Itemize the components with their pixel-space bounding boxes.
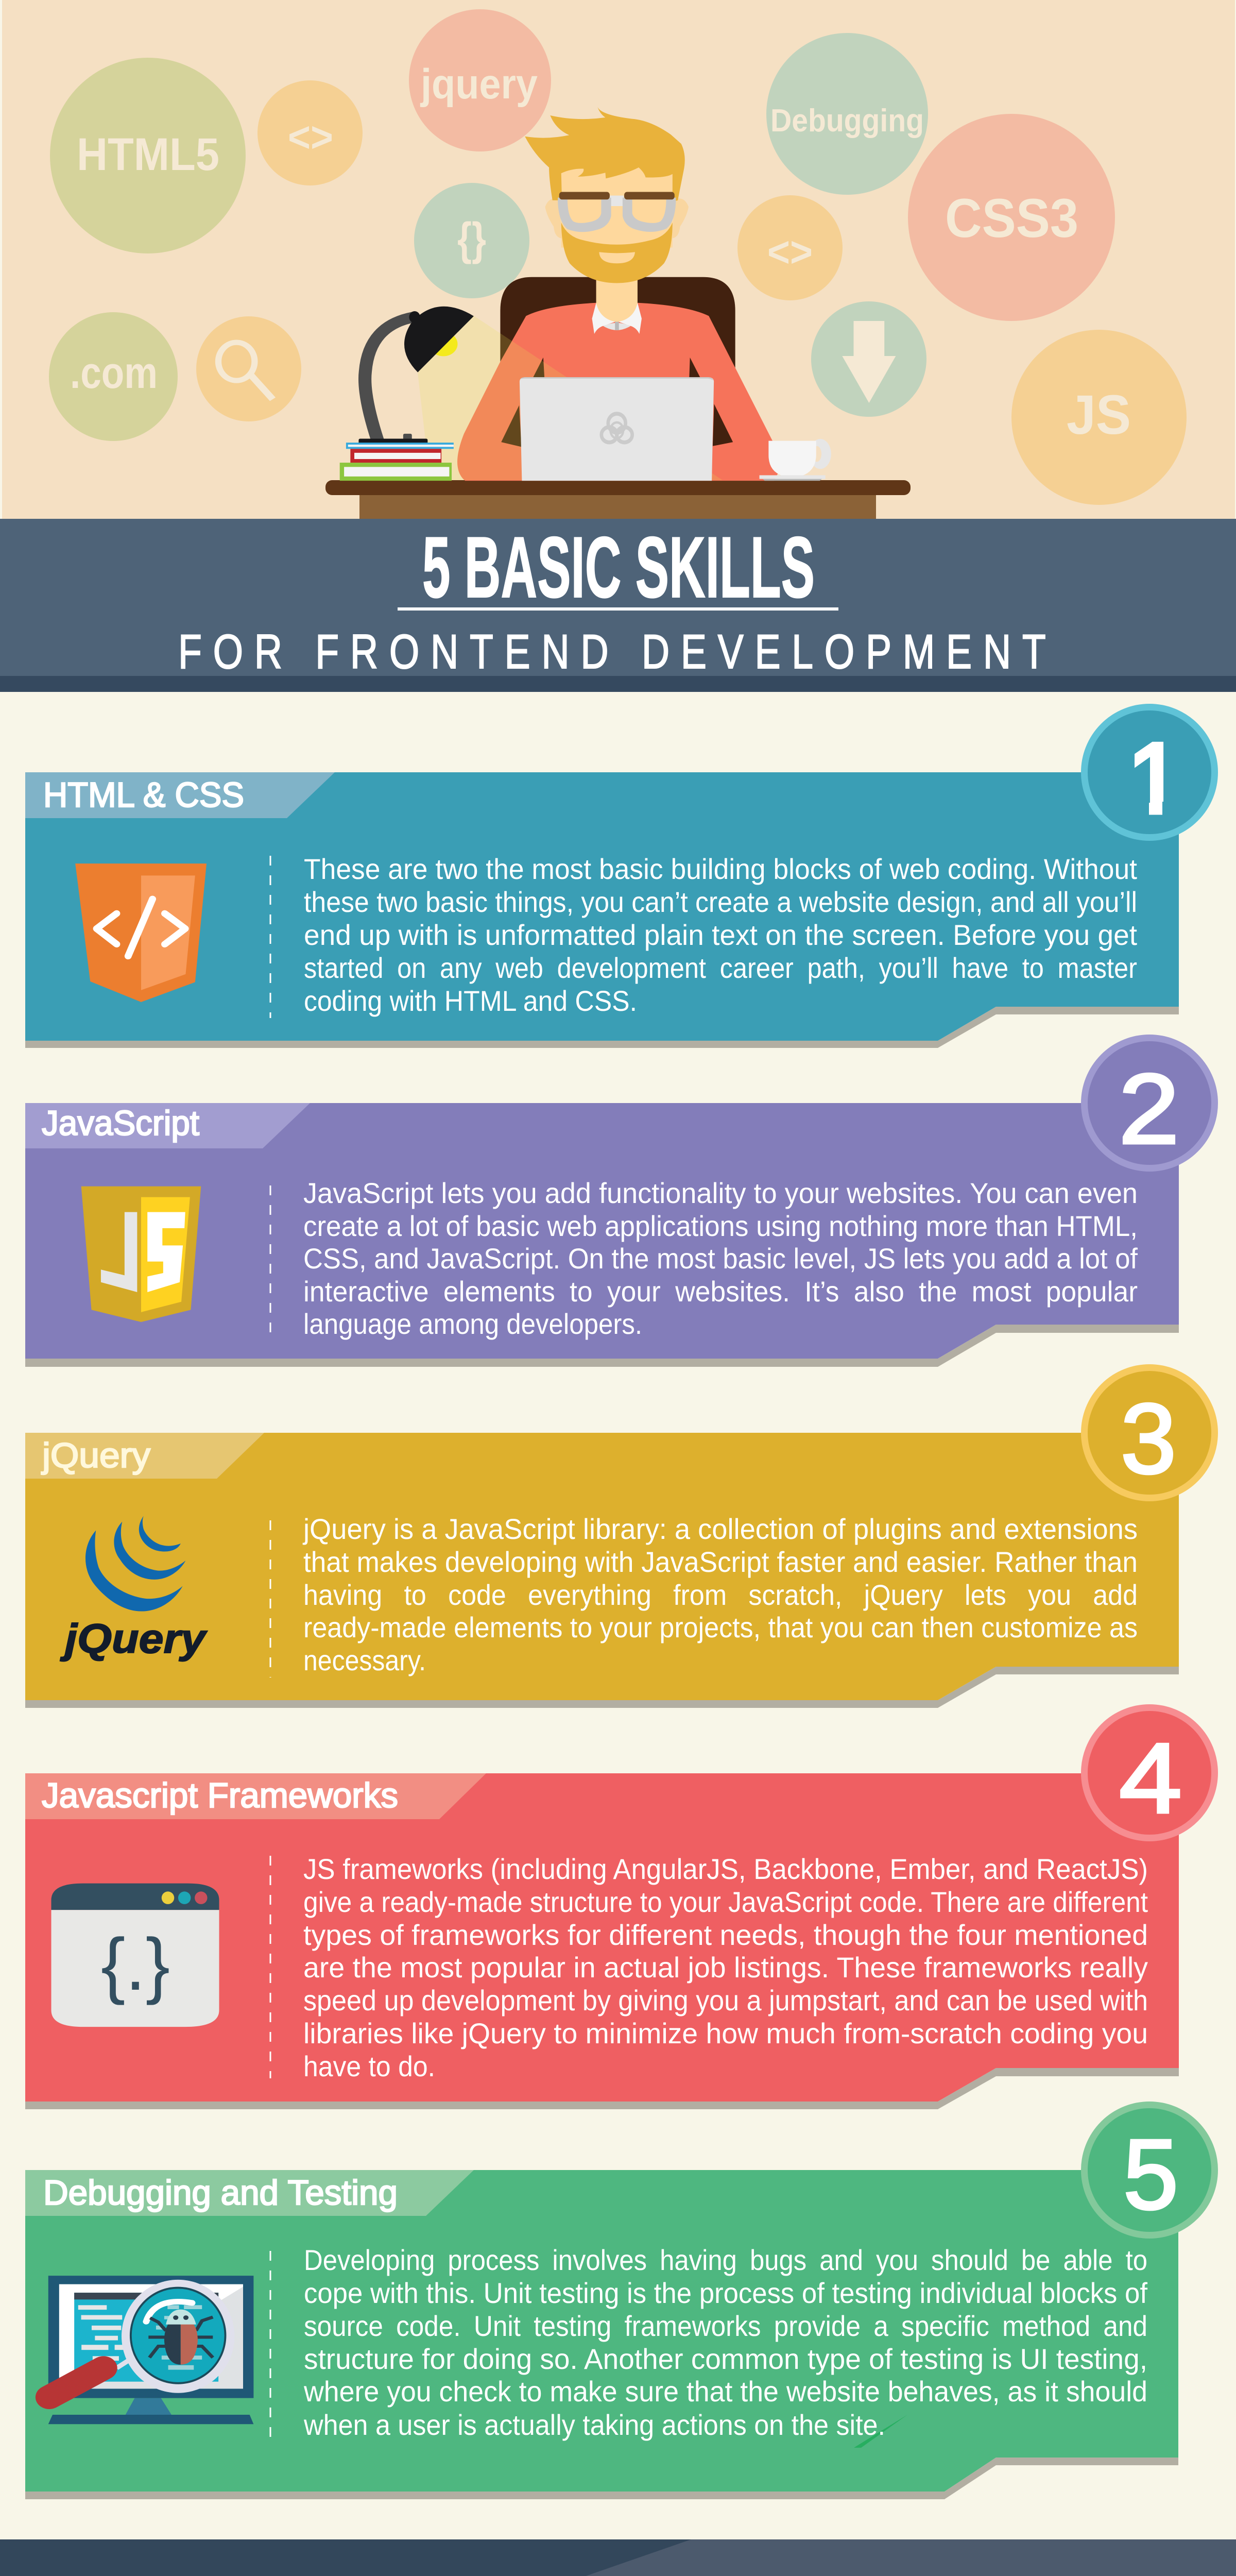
- bubble: angle brackets left: <>: [288, 114, 333, 161]
- bubble: jquery: [409, 9, 551, 151]
- body text: JavaScript lets you add functionality to your websites. You can even: [303, 1177, 1138, 1209]
- bubble: .com: .com: [70, 348, 158, 398]
- bubble: Debugging: [766, 33, 928, 195]
- body text: cope with this. Unit testing is the process of testing individual blocks of: [304, 2277, 1147, 2309]
- number badge 3: [1085, 1367, 1214, 1498]
- lamp base: [358, 434, 427, 444]
- number badge 4: [1085, 1707, 1214, 1838]
- bubble: jquery: jquery: [420, 61, 538, 108]
- bubble: angle brackets right: [737, 195, 843, 300]
- hero illustration: [2, 0, 1235, 519]
- body text: ready-made elements to your projects, that you can then customize as: [303, 1611, 1138, 1643]
- bubble: JS: JS: [1067, 383, 1131, 446]
- body text: necessary.: [303, 1644, 426, 1676]
- face: [561, 166, 673, 248]
- bubble: curly braces: {}: [457, 213, 486, 264]
- body text: [303, 1853, 1148, 2082]
- title rule: [398, 607, 838, 611]
- main title: 5 BASIC SKILLS: [422, 519, 815, 616]
- body text: these two basic things, you can’t create a website design, and all you’ll: [304, 886, 1137, 918]
- lamp arm: [365, 317, 414, 440]
- bubble: HTML5: HTML5: [77, 128, 219, 180]
- neck: [596, 274, 638, 321]
- laptop: [520, 377, 714, 481]
- body text: have to do.: [303, 2050, 435, 2082]
- icon: JS shield: [81, 1187, 201, 1322]
- bubble: Debugging: Debugging: [770, 103, 924, 139]
- gaps between arms and body: [501, 358, 733, 447]
- monitor: [48, 2276, 253, 2424]
- body text: are the most popular in actual job listings. These frameworks really: [303, 1951, 1148, 1984]
- body text: CSS, and JavaScript. On the most basic level, JS lets you add a lot of: [303, 1242, 1138, 1275]
- body text: source code. Unit testing frameworks provide a specific method and: [304, 2310, 1147, 2342]
- bubble: .com: [49, 312, 178, 441]
- body text: These are two the most basic building blocks of web coding. Without: [304, 853, 1137, 885]
- title banner: [0, 519, 1236, 692]
- body text: libraries like jQuery to minimize how much from-scratch coding you: [303, 2017, 1148, 2049]
- coffee cup: [760, 439, 831, 481]
- body text: speed up development by giving you a jumpstart, and can be used with: [303, 1984, 1148, 2016]
- chair: [500, 277, 735, 368]
- heading tab: [25, 1433, 264, 1479]
- ears: [545, 198, 689, 239]
- body text: structure for doing so. Another common type of testing is UI testing,: [304, 2343, 1147, 2375]
- subtitle: FOR FRONTEND DEVELOPMENT: [178, 625, 1046, 679]
- bubble: HTML5: [50, 58, 246, 253]
- body text: language among developers.: [303, 1308, 642, 1340]
- icon: jQuery logo: jQuery: [60, 1616, 208, 1662]
- bubble: JS: [1011, 330, 1187, 505]
- panel: jQuery: [25, 1367, 1214, 1708]
- panel: HTML & CSS: [25, 707, 1214, 1048]
- icon: jQuery logo: [60, 1516, 208, 1662]
- body text: give a ready-made structure to your JavaScript code. There are different: [303, 1886, 1148, 1918]
- lamp light cone: [418, 316, 723, 480]
- panel: Javascript Frameworks: [25, 1707, 1214, 2109]
- lamp shade: [404, 307, 474, 372]
- heading tab: jQuery: [41, 1436, 150, 1475]
- body text: where you check to make sure that the website behaves, as it should: [303, 2375, 1147, 2408]
- eyebrows: [559, 192, 675, 199]
- body text: when a user is actually taking actions on the site.: [303, 2409, 885, 2441]
- body text: jQuery is a JavaScript library: a collection of plugins and extensions: [302, 1513, 1138, 1545]
- body text: types of frameworks for different needs, though the four mentioned: [303, 1919, 1148, 1951]
- body text: end up with is unformatted plain text on the screen. Before you get: [304, 919, 1137, 951]
- number badge 2: [1085, 1038, 1214, 1168]
- heading tab: [25, 772, 335, 818]
- shirt collar: [592, 303, 642, 334]
- bug: [148, 2310, 213, 2365]
- heading tab: HTML & CSS: [43, 775, 244, 815]
- heading tab: [25, 1103, 310, 1148]
- mouth: [599, 252, 635, 263]
- bubble: curly braces: [414, 183, 529, 298]
- number badge 2: 2: [1119, 1053, 1179, 1164]
- beard: [561, 223, 673, 283]
- number badge 4: 4: [1119, 1722, 1182, 1834]
- body text: that makes developing with JavaScript faster and easier. Rather than: [303, 1546, 1138, 1578]
- panel: JavaScript: [25, 1038, 1214, 1367]
- glasses: [558, 196, 676, 232]
- body text: Developing process involves having bugs and you should be able to: [304, 2244, 1147, 2276]
- body text: create a lot of basic web applications using nothing more than HTML,: [303, 1210, 1138, 1242]
- developer character: [418, 106, 831, 481]
- body text: coding with HTML and CSS.: [304, 985, 637, 1017]
- body text: having to code everything from scratch, jQuery lets you add: [303, 1579, 1138, 1611]
- number badge 5: 5: [1123, 2119, 1178, 2230]
- body text: JS frameworks (including AngularJS, Backbone, Ember, and ReactJS): [303, 1853, 1148, 1885]
- panel: Debugging and Testing: [25, 2105, 1214, 2499]
- body text: interactive elements to your websites. It’s also the most popular: [303, 1275, 1138, 1308]
- icon: monitor with magnified bug: [48, 2276, 253, 2424]
- number badge 1: 1: [1127, 722, 1182, 834]
- bubble: download arrow: [811, 301, 926, 417]
- body text: [303, 2244, 1147, 2441]
- stray highlight stroke: [854, 2415, 907, 2448]
- bubble: search icon: [196, 316, 301, 421]
- heading tab: [25, 1773, 486, 1819]
- number badge 1: [1085, 707, 1214, 838]
- desk: [325, 480, 911, 519]
- bubble: angle brackets left: [258, 80, 363, 185]
- heading tab: Javascript Frameworks: [42, 1776, 398, 1815]
- icon: HTML5 shield: [75, 863, 207, 1002]
- body text: [303, 1177, 1138, 1340]
- sweater: [457, 303, 778, 481]
- body text: [304, 853, 1137, 1017]
- desk lamp and books: [340, 307, 474, 481]
- heading tab: JavaScript: [42, 1104, 199, 1143]
- body text: [302, 1513, 1138, 1676]
- bubble: CSS3: [908, 114, 1115, 321]
- number badge 3: 3: [1121, 1383, 1176, 1494]
- bubble: CSS3: CSS3: [945, 187, 1078, 249]
- bubble: angle brackets right: <>: [767, 229, 813, 276]
- heading tab: [25, 2170, 474, 2216]
- icon: code window: [51, 1884, 219, 2027]
- footer band: [0, 2539, 1236, 2576]
- stack of books: [340, 443, 454, 481]
- lamp bulb: [429, 332, 458, 356]
- body text: started on any web development career path, you’ll have to master: [304, 952, 1137, 984]
- number badge 5: [1085, 2105, 1214, 2235]
- hair: [525, 106, 685, 201]
- heading tab: Debugging and Testing: [43, 2173, 398, 2212]
- icon: code window: {.}: [101, 1924, 170, 2006]
- magnifying glass: [49, 2280, 234, 2397]
